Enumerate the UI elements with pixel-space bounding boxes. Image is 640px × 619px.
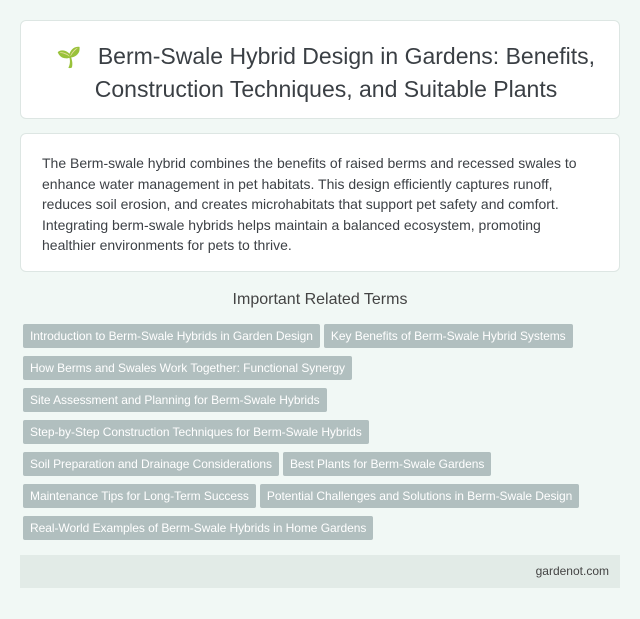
description panel — [20, 133, 620, 272]
related term tags — [23, 324, 579, 540]
related term tags: Key Benefits of Berm-Swale Hybrid Systems — [331, 329, 566, 343]
description text: Integrating berm-swale hybrids helps maintain a balanced ecosystem, promoting — [42, 216, 541, 232]
description text: The Berm-swale hybrid combines the benefits of raised berms and recessed swales to — [42, 155, 577, 171]
title: 🌱 Berm-Swale Hybrid Design in Gardens: Benefits, Construction Techniques, and Suitable Plants — [57, 43, 595, 102]
related term tags: Potential Challenges and Solutions in Berm-Swale Design — [267, 489, 572, 503]
related term tags: Site Assessment and Planning for Berm-Swale Hybrids — [30, 393, 320, 407]
description text — [42, 155, 577, 253]
description text: enhance water management in pet habitats. This design efficiently captures runoff, — [42, 176, 553, 192]
description text: healthier environments for pets to thrive. — [42, 237, 292, 253]
footer credit: gardenot.com — [536, 564, 609, 578]
related term tags: Introduction to Berm-Swale Hybrids in Garden Design — [30, 329, 313, 343]
related term tags: Best Plants for Berm-Swale Gardens — [290, 457, 484, 471]
related term tags: Soil Preparation and Drainage Considerations — [30, 457, 272, 471]
related term tags: Real-World Examples of Berm-Swale Hybrids in Home Gardens — [30, 521, 366, 535]
footer — [20, 555, 620, 588]
related term tags: Maintenance Tips for Long-Term Success — [30, 489, 249, 503]
related term tags: Step-by-Step Construction Techniques for Berm-Swale Hybrids — [30, 425, 362, 439]
description text: reduces soil erosion, and creates microhabitats that support pet safety and comfort. — [42, 196, 559, 212]
related term tags: How Berms and Swales Work Together: Functional Synergy — [30, 361, 345, 375]
section heading: Important Related Terms — [233, 291, 407, 308]
header panel — [20, 20, 620, 119]
